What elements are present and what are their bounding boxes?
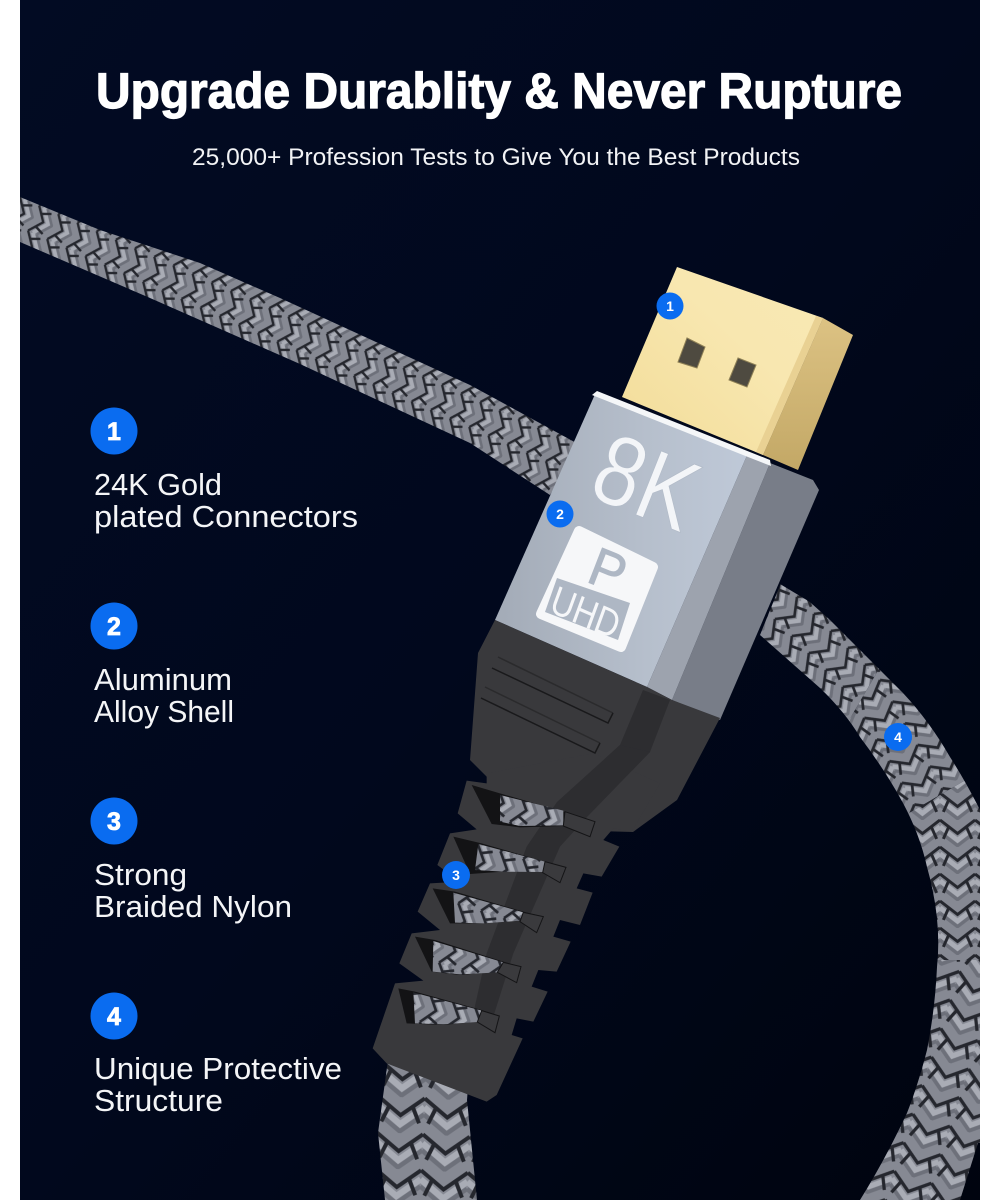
badge 2: 2 xyxy=(107,613,121,641)
P letter: P xyxy=(581,537,635,605)
boot ribs xyxy=(481,657,613,753)
aluminum shell front face xyxy=(495,392,748,687)
callout marker 3 on strain relief xyxy=(442,861,470,889)
subtitle: 25,000+ Profession Tests to Give You the Best Products xyxy=(192,144,800,171)
label 3: Braided Nylon xyxy=(94,889,292,924)
window ring 3 xyxy=(433,888,543,933)
label 4: Unique Protective xyxy=(94,1051,342,1086)
callout marker 4 on cable xyxy=(884,723,912,751)
braided cable: upper left strand xyxy=(20,197,580,495)
label 4 xyxy=(94,1051,342,1118)
8K mark: 8K xyxy=(578,410,715,553)
UHD band xyxy=(545,578,630,640)
feature 1 xyxy=(90,408,358,534)
label 2: Aluminum xyxy=(94,662,232,697)
feature 3 xyxy=(90,798,292,924)
feature 2 xyxy=(90,602,234,729)
badge 1: 1 xyxy=(107,418,121,446)
label 3 xyxy=(94,857,292,924)
label 1: 24K Gold xyxy=(94,467,222,502)
badge 1 xyxy=(90,408,138,454)
badge 4: 4 xyxy=(107,1003,121,1031)
connector plug xyxy=(470,267,853,832)
callout marker 1 on plug xyxy=(656,292,684,320)
gold connector top face xyxy=(622,267,823,455)
callout marker 4 on cable: 4 xyxy=(894,729,902,745)
strain relief silhouette xyxy=(373,753,660,1102)
DP UHD logo xyxy=(541,531,653,648)
label 1 xyxy=(94,467,358,534)
callout marker 2 on shell: 2 xyxy=(556,506,564,522)
aluminum shell bevel xyxy=(647,453,770,700)
spine shading xyxy=(473,745,650,1017)
title: Upgrade Durablity & Never Rupture xyxy=(96,63,902,119)
gold connector ridge xyxy=(756,316,823,455)
label 2: Alloy Shell xyxy=(94,694,234,729)
braided cable: right curved strand xyxy=(760,584,980,1200)
badge 2 xyxy=(90,602,138,650)
callout marker 1 on plug: 1 xyxy=(666,298,674,314)
strain relief xyxy=(373,745,660,1102)
connector contact holes xyxy=(678,338,756,387)
badge 4 xyxy=(90,992,138,1040)
badge 3: 3 xyxy=(107,808,121,836)
window ring 4 xyxy=(415,937,521,983)
callout marker 3 on strain relief: 3 xyxy=(452,867,460,883)
braided cable: bottom strand xyxy=(378,1060,477,1200)
window ring 2 xyxy=(453,837,566,883)
window ring 1 xyxy=(472,785,595,837)
label 3: Strong xyxy=(94,857,187,892)
label 1: plated Connectors xyxy=(94,499,358,534)
label 4: Structure xyxy=(94,1083,223,1118)
boot dark strip xyxy=(557,690,670,817)
shell white top edge xyxy=(592,391,771,466)
window ring 5 xyxy=(398,988,499,1033)
label 2 xyxy=(94,662,234,729)
aluminum shell side face xyxy=(672,463,819,720)
callout marker 2 on shell xyxy=(546,500,574,528)
UHD letters: UHD xyxy=(545,577,626,648)
feature 4 xyxy=(90,992,342,1118)
gold connector side face xyxy=(763,318,853,470)
rubber boot xyxy=(470,620,720,832)
badge 3 xyxy=(90,798,138,844)
